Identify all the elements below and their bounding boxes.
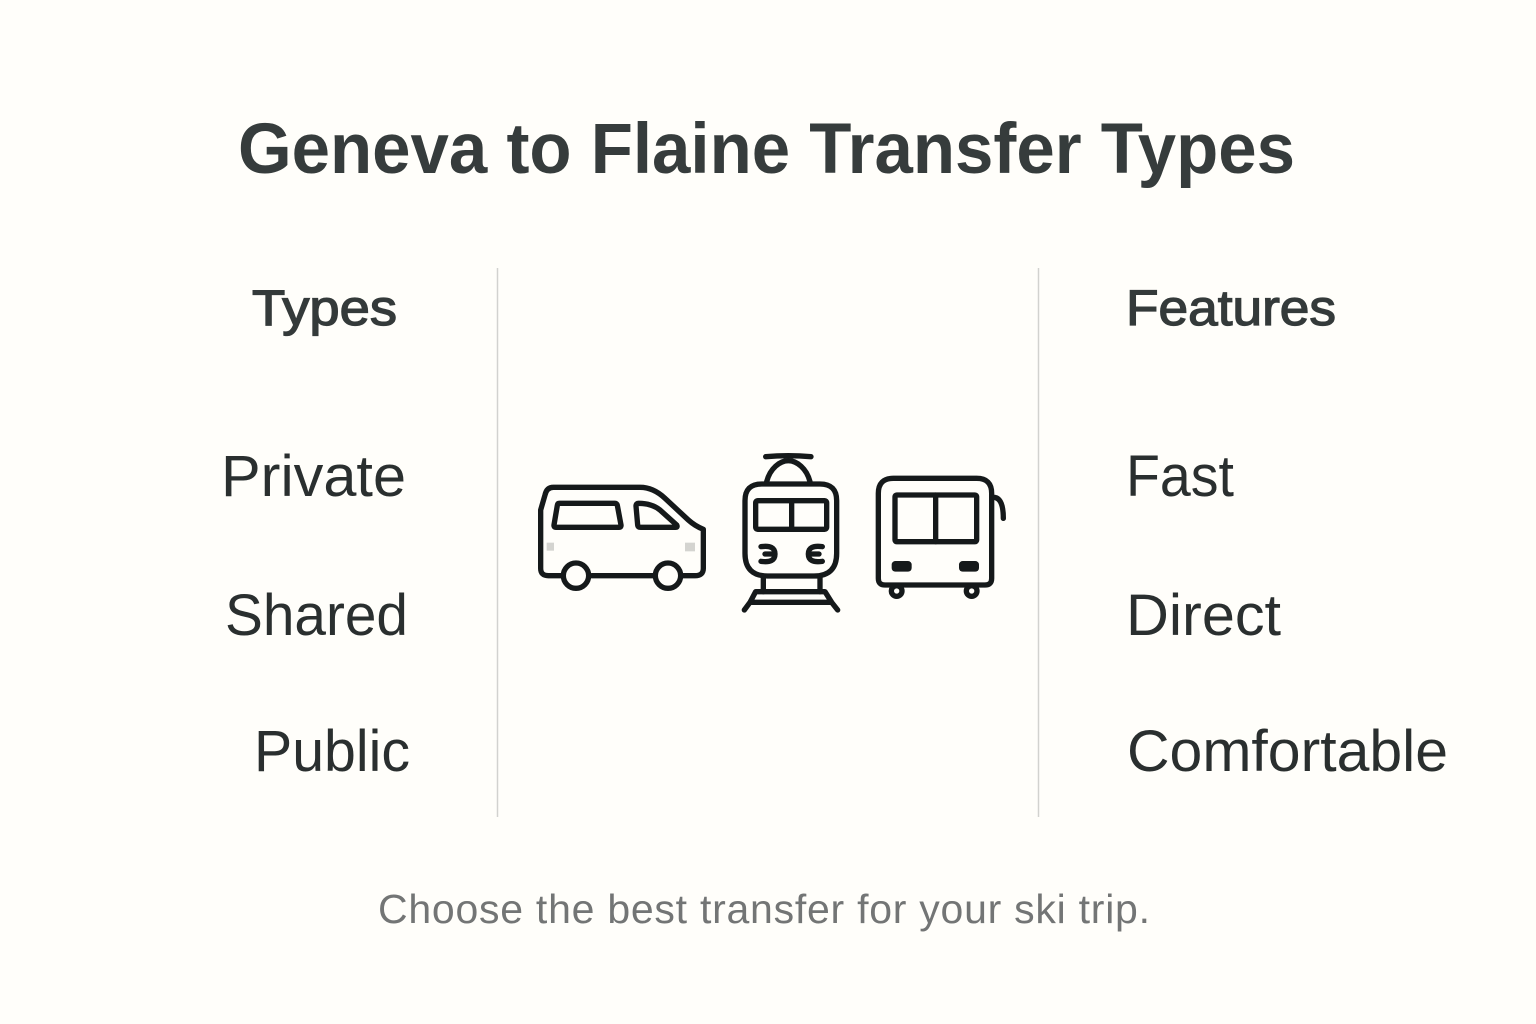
icon: train [744,456,838,610]
panel: features column [1126,280,1448,784]
heading: types: Types [252,280,397,336]
text: public: Public [254,719,410,784]
icon: van [541,487,703,588]
icon: bus [878,478,1003,596]
caption: Choose the best transfer for your ski trip. [378,886,1150,932]
text: fast: Fast [1126,444,1234,509]
text: private: Private [221,444,406,509]
heading: features: Features [1126,280,1336,336]
text: direct: Direct [1126,583,1281,648]
text: shared: Shared [225,583,408,648]
text: comfortable: Comfortable [1127,719,1448,784]
panel: types column [221,280,410,784]
title: Geneva to Flaine Transfer Types [238,110,1295,189]
